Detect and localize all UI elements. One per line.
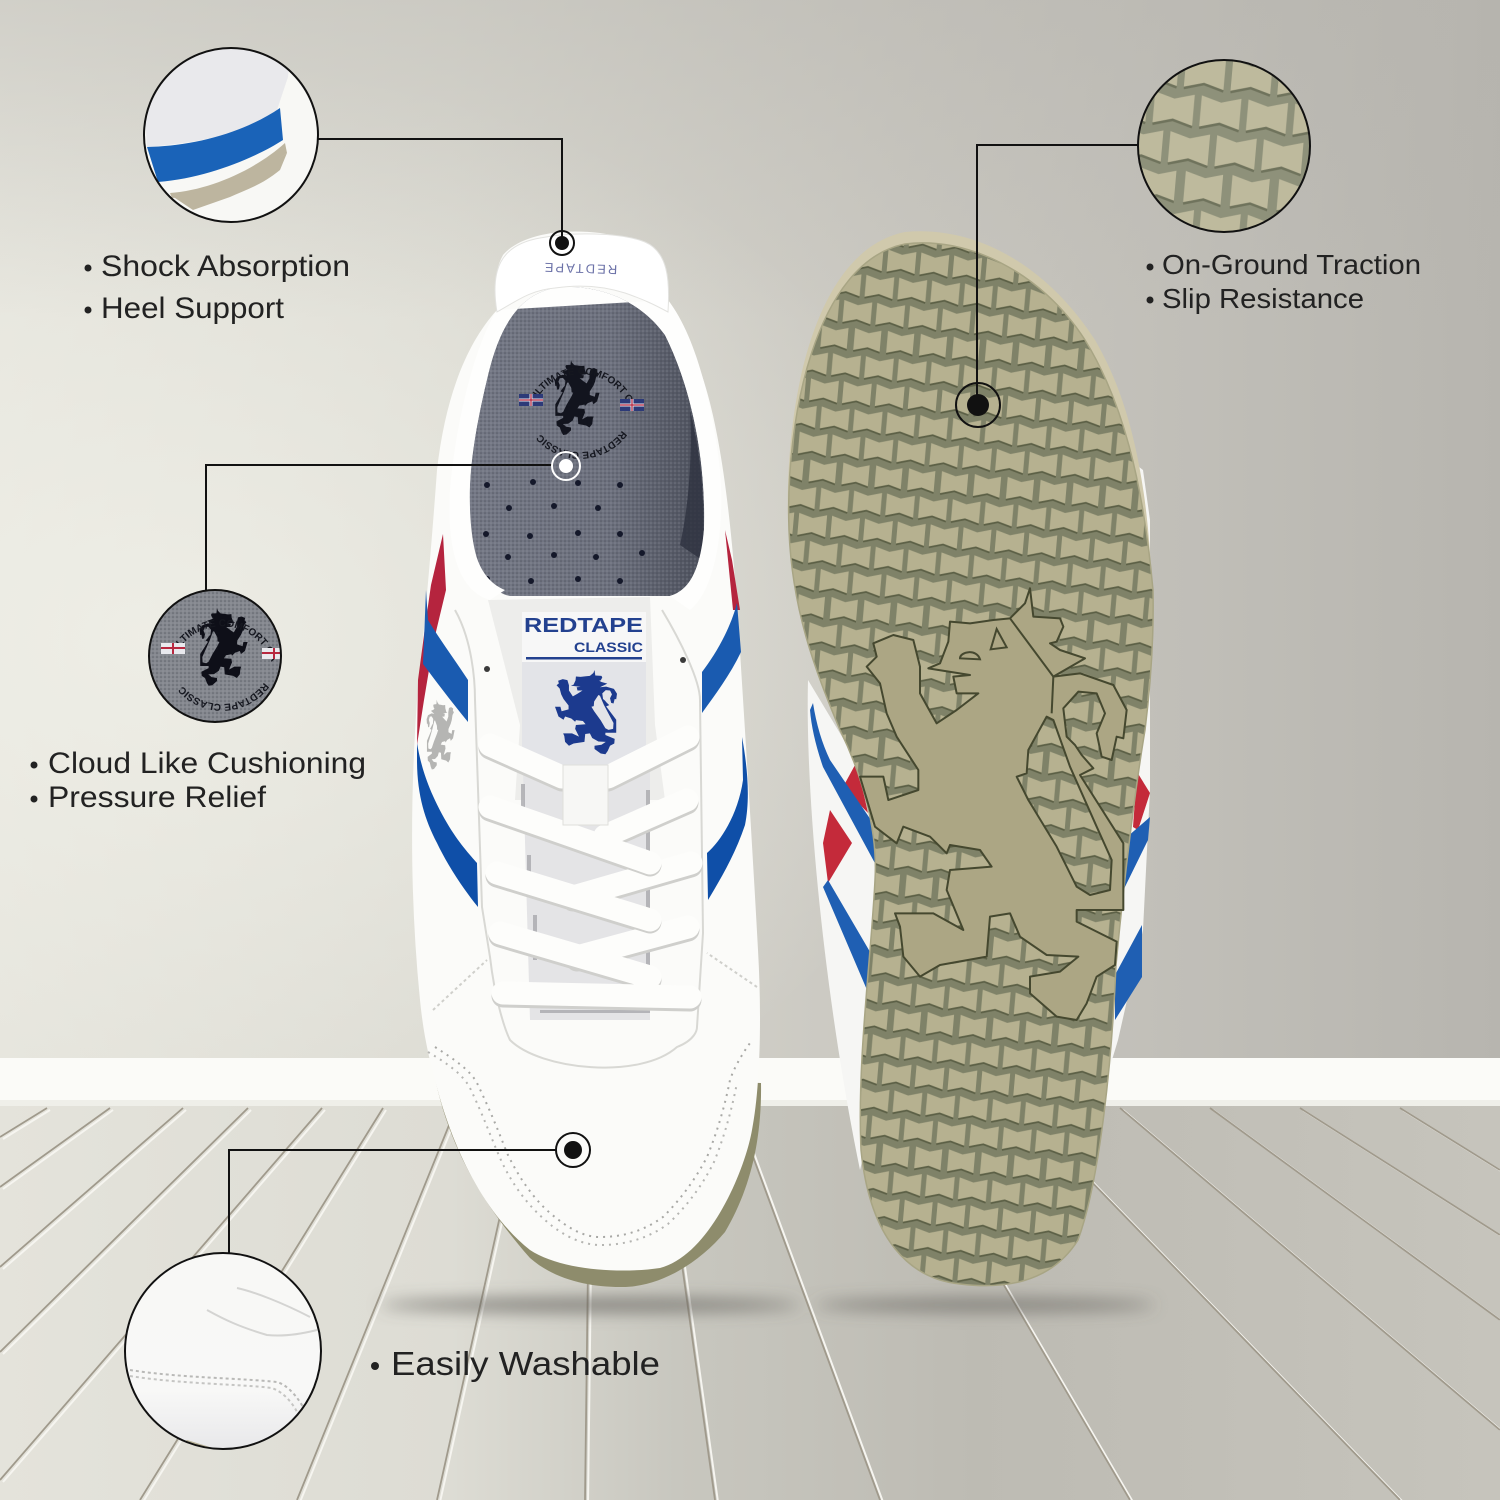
- red stripes left: [823, 765, 868, 883]
- detail circle: leather toe: [125, 1253, 321, 1449]
- insole lion logo: [555, 360, 600, 435]
- laces: [490, 737, 691, 1000]
- blue right upper stripe: [702, 603, 741, 713]
- tread sole: [789, 243, 1153, 1286]
- connector line: [318, 139, 562, 243]
- mane line: [1010, 618, 1053, 713]
- wooden floor: [0, 1106, 1500, 1500]
- marker: [552, 452, 580, 480]
- wall background: [0, 0, 1500, 1062]
- callout: washable: [125, 1133, 660, 1449]
- connector line: [206, 465, 552, 590]
- callout: cushioning: [30, 451, 581, 814]
- white upper behind sole, left: [808, 680, 900, 1170]
- lion emblem on sole: [860, 588, 1127, 1020]
- heel rim: [788, 231, 1152, 590]
- insole: [470, 287, 704, 596]
- left shoe: top view: [126, 47, 762, 1328]
- feature text: Slip Resistance: [1162, 283, 1364, 314]
- tongue label: [522, 612, 646, 768]
- insole arc text bottom: REDTAPE CLASSIC: [536, 431, 627, 459]
- lace keeper: [563, 765, 608, 825]
- feature text: Pressure Relief: [48, 781, 267, 814]
- insole flag right: [620, 399, 644, 411]
- feature text: [84, 250, 350, 325]
- insole arc text top: ULTIMATE COMFORT GAME: [532, 368, 632, 399]
- white upper: [412, 231, 760, 1271]
- detail circle: insole logo: REDTAPE CLASSIC: [178, 683, 269, 711]
- heel tab brand text: REDTAPE: [543, 260, 617, 277]
- callout: traction: [956, 50, 1421, 427]
- tongue: [488, 597, 665, 800]
- marker: [550, 231, 574, 255]
- detail circle: insole logo: ULTIMATE COMFORT GAME: [176, 621, 274, 662]
- red stripes right: [1133, 772, 1150, 830]
- blue lion logo: [555, 670, 617, 754]
- detail circle: heel cushioning: [140, 40, 318, 222]
- eyelet holes: [484, 657, 686, 672]
- connector line: [977, 145, 1138, 405]
- lion ear: [991, 629, 1007, 649]
- marker: [556, 1133, 590, 1167]
- blue stripes left: [810, 703, 877, 997]
- feature text: Shock Absorption: [101, 250, 350, 283]
- grey lion logo: [427, 700, 455, 770]
- detail circle: insole logo: [148, 589, 282, 723]
- feature text: Cloud Like Cushioning: [48, 747, 366, 780]
- feature text: [30, 747, 366, 814]
- brand name: REDTAPE: [524, 615, 643, 637]
- baseboard: [0, 1058, 1500, 1106]
- lion eye: [960, 652, 980, 659]
- heel tab: [495, 234, 669, 312]
- insole flag left: [519, 394, 543, 406]
- feature text: Heel Support: [101, 292, 285, 325]
- white upper behind sole: [1100, 460, 1150, 1100]
- feature text: On-Ground Traction: [1162, 249, 1421, 280]
- collar lining: [449, 287, 721, 610]
- lace bed: [523, 770, 650, 1020]
- connector line: [229, 1150, 556, 1255]
- blue left lower stripe: [417, 743, 478, 907]
- blue stripes right: [1115, 817, 1150, 1020]
- detail circle: tread: [1137, 59, 1311, 233]
- rule: [526, 657, 642, 660]
- callout: shock absorption: [84, 40, 574, 325]
- insole perforations: [483, 479, 645, 584]
- feature text: [1146, 249, 1421, 314]
- right shoe: sole view: [788, 231, 1153, 1286]
- marker: [956, 383, 1000, 427]
- blue right lower stripe: [707, 737, 748, 900]
- outsole rim: [434, 1073, 761, 1287]
- floor shadows: [380, 1298, 1155, 1312]
- red right stripe: [725, 530, 740, 610]
- model name: CLASSIC: [574, 639, 643, 655]
- feature text: Easily Washable: [391, 1345, 660, 1382]
- lace bed shadows: [521, 784, 650, 1013]
- insole mesh: [470, 287, 704, 596]
- red left stripe: [417, 534, 446, 745]
- seams: [428, 610, 757, 1245]
- insole side shadow: [680, 410, 704, 560]
- blue left upper stripe: [423, 590, 468, 722]
